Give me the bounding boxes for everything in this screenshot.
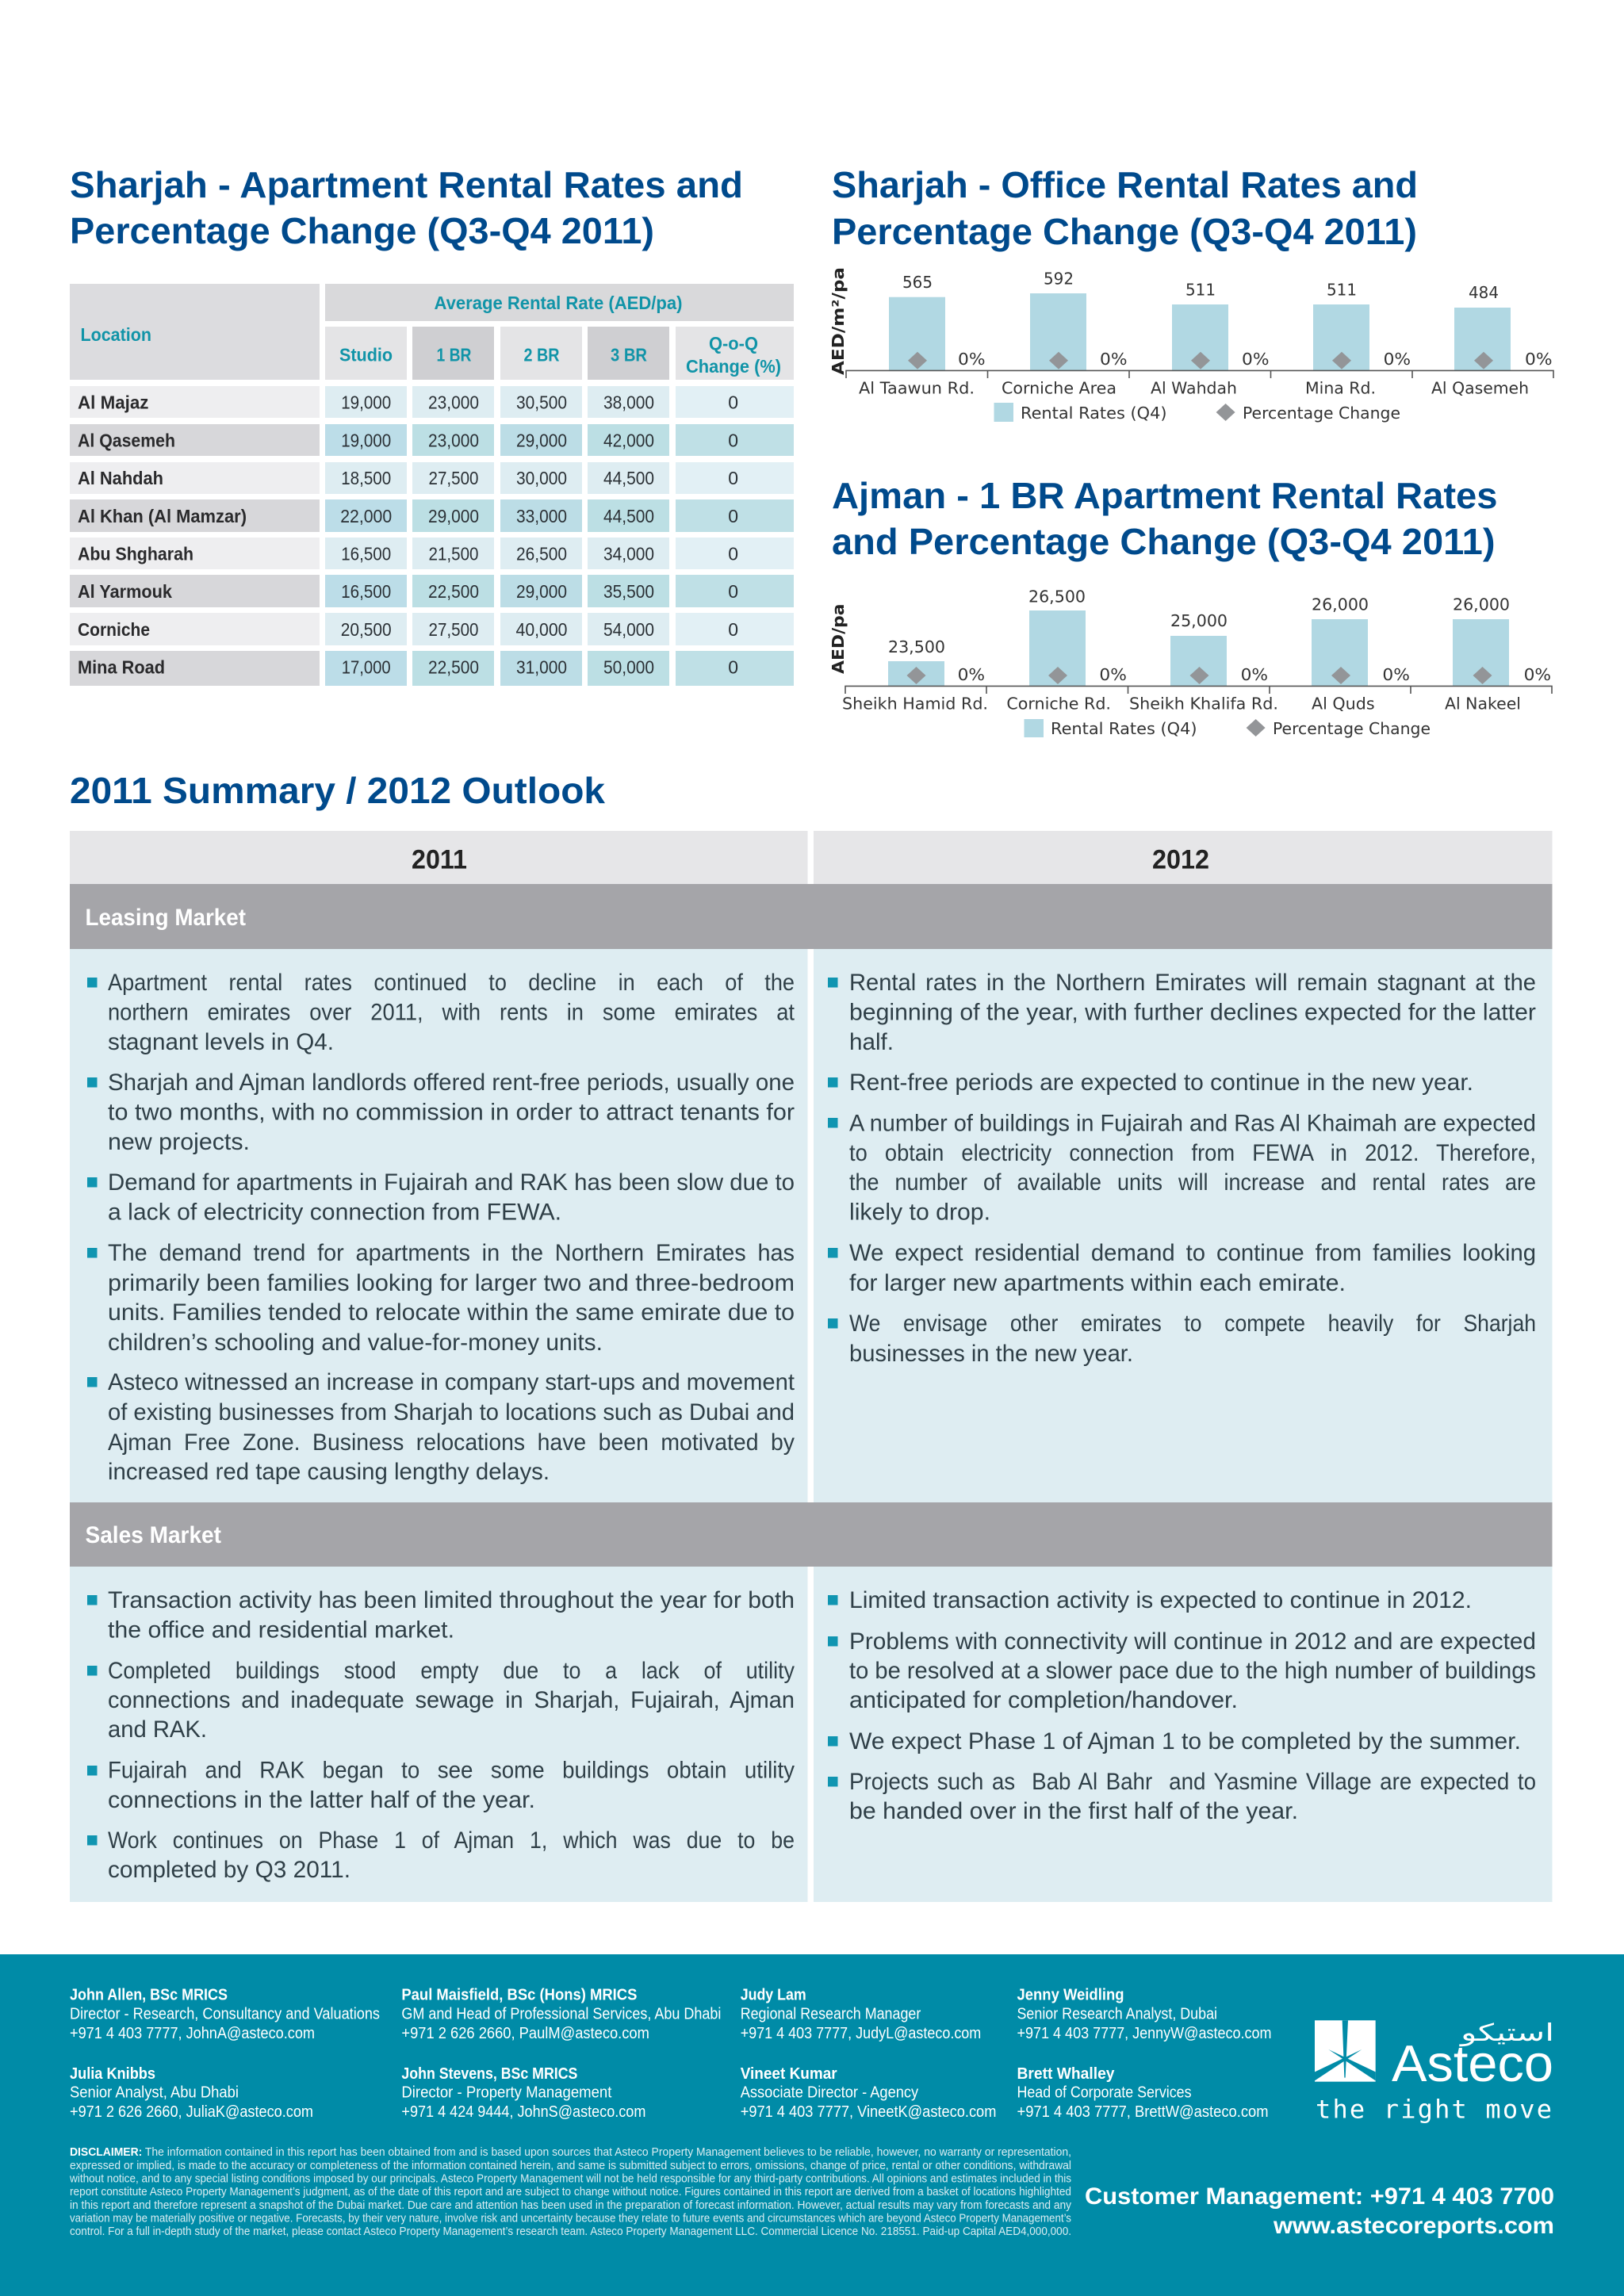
panel: sales market 2011: Completed buildings stood empty due to a lack of utility [108,1658,795,1684]
table row: Al Qasemeh: 0 [728,430,738,450]
table: Sharjah apartment rental rates [70,284,794,686]
table header: Change (%) [686,356,781,377]
panel: sales market 2011: connections and inadequate sewage in Sharjah, Fujairah, Ajman [108,1687,795,1713]
panel: leasing market 2011: children’s schooling and value-for-money units. [108,1330,603,1356]
table row: Mina Road [70,651,794,686]
panel: leasing market 2012: A number of buildings in Fujairah and Ras Al Khaimah are expected [849,1110,1536,1137]
panel: leasing market 2012: We expect residential demand to continue from families looking [849,1240,1536,1266]
axis [845,686,1552,694]
panel: leasing market 2012: likely to drop. [849,1199,990,1226]
table row: Al Yarmouk: 0 [728,581,738,602]
category labels: Al Wahdah [1151,379,1237,398]
panel: leasing market 2012 [814,949,1553,1502]
category labels: Corniche Area [1002,379,1116,398]
panel: leasing market 2011: Sharjah and Ajman landlords offered rent-free periods, usually one [108,1070,795,1096]
table row: Al Khan (Al Mamzar): 22,000 [340,506,392,526]
contact: Paul Maisfield [401,1987,721,2042]
panel: leasing market 2011: northern emirates over 2011, with rents in some emirates at [108,999,795,1026]
panel: sales market 2012: anticipated for completion/handover. [849,1687,1238,1713]
table header: 1 BR [436,344,472,365]
table row: Mina Road: 31,000 [516,656,567,677]
percentage change markers: 0% [1525,350,1553,369]
panel: sales market 2011 [70,1567,807,1902]
table row: Abu Shgharah: 0 [728,544,738,564]
category labels: Al Qasemeh [1431,379,1529,398]
category labels: Al Nakeel [1445,695,1521,714]
table row: Al Majaz: 30,500 [516,392,567,413]
panel: leasing market 2011: to two months, with no commission in order to attract tenants for [108,1099,795,1126]
contact: Jenny Weidling [1017,1987,1272,2042]
footer [0,1954,1624,2296]
bar values: 25,000 [1170,611,1228,630]
contact: Julia Knibbs: +971 2 626 2660, JuliaK@asteco.com [70,2103,313,2121]
contact: Vineet Kumar: Vineet Kumar [741,2065,837,2083]
disclaimer: variation may be materially positive or negative. Forecasts, by their very nature, involve risk and uncertainty because they relate to future events and circumstances which are beyond Asteco Property Management’s [70,2212,1071,2225]
panel: leasing market 2012: beginning of the year, with further declines expected for the latter [849,999,1536,1026]
panel: sales market 2012: Problems with connectivity will continue in 2012 and are expected [849,1628,1536,1655]
contact: Brett Whalley [1017,2065,1269,2121]
category labels: Al Quds [1312,695,1375,714]
contact: John Allen: +971 4 403 7777, JohnA@asteco.com [70,2025,315,2042]
legend [1025,719,1431,738]
disclaimer: without notice, and to any special listing conditions imposed by our principals. Asteco Property Management will not be held responsible for any third-party contributions. All opinions and estimates included in this [69,2172,1071,2185]
table row: Al Nahdah: 18,500 [341,468,391,488]
year header: 2012 [814,831,1553,884]
category labels: Al Taawun Rd. [859,379,975,398]
percentage change markers: 0% [1384,350,1411,369]
disclaimer: report constitute Asteco Property Management’s judgment, as of the date of this report and are subject to change without notice. Figures contained in this report are derived from a basket of locations highlighted [70,2186,1071,2198]
table row: Al Nahdah: 30,000 [516,468,567,488]
legend [994,403,1400,423]
bar values: 565 [902,273,933,292]
category labels [859,379,1529,398]
table row: Al Yarmouk: 22,500 [428,581,479,602]
year header: 2011: 2011 [412,845,467,875]
panel: sales market 2011: connections in the latter half of the year. [108,1787,535,1813]
heading: Sharjah office rental rates: Sharjah - Office Rental Rates and [832,164,1418,205]
contact: John Stevens: Director - Property Management [401,2084,612,2102]
contact: Brett Whalley: +971 4 403 7777, BrettW@asteco.com [1017,2103,1269,2121]
contact: Paul Maisfield: GM and Head of Professional Services, Abu Dhabi [401,2006,721,2023]
section header: Leasing Market: Leasing Market [86,905,246,931]
percentage change markers: 0% [1099,665,1127,684]
panel: leasing market 2011: stagnant levels in Q4. [108,1029,334,1055]
disclaimer: in this report and therefore represent a snapshot of the Dubai market. Due care and attention has been used in the preparation of forecast information. However, actual results may vary from forecasts and any [70,2199,1072,2212]
table row: Al Nahdah: Al Nahdah [78,468,163,488]
percentage change markers: 0% [958,350,985,369]
table row: Al Nahdah: 0 [728,468,738,488]
disclaimer: DISCLAIMER: The information contained in this report has been obtained from and is based upon sources that Asteco Property Management believes to be reliable, however, no warranty or representation, [70,2146,1071,2159]
section header: Sales Market [70,1502,1553,1567]
contact: Julia Knibbs: Julia Knibbs [70,2065,155,2083]
table row: Al Qasemeh: 42,000 [603,430,654,450]
contact: Vineet Kumar: Associate Director - Agency [741,2084,918,2102]
table row: Al Yarmouk: 29,000 [516,581,567,602]
bar values: 26,000 [1453,595,1510,614]
heading: Ajman apartment rental rates [832,475,1497,562]
category labels: Sheikh Hamid Rd. [842,695,988,714]
contact: John Stevens: John Stevens, BSc MRICS [401,2065,577,2083]
contact: Brett Whalley: Head of Corporate Services [1017,2084,1191,2102]
heading: Sharjah apartment rental rates [70,164,743,251]
panel: leasing market 2011: increased red tape causing lengthy delays. [108,1459,550,1485]
bar values: 511 [1327,281,1357,300]
panel: sales market 2012: Projects such as Bab Al Bahr and Yasmine Village are expected to [849,1769,1536,1795]
panel: sales market 2012: Limited transaction activity is expected to continue in 2012. [849,1587,1472,1613]
panel: sales market 2011: Transaction activity has been limited throughout the year for both [108,1587,795,1613]
contact: John Stevens: +971 4 424 9444, JohnS@asteco.com [401,2103,645,2121]
logo: Asteco [1315,2019,1554,2125]
contact: Julia Knibbs: Senior Analyst, Abu Dhabi [70,2084,239,2102]
customer management contact [1085,2183,1554,2239]
disclaimer [69,2146,1072,2238]
contact: Judy Lam: Judy Lam [741,1987,806,2004]
panel: leasing market 2012: to obtain electricity connection from FEWA in 2012. Therefore, [849,1140,1536,1166]
panel: leasing market 2012: the number of available units will increase and rental rates are [849,1169,1536,1196]
table row: Corniche: 20,500 [341,619,392,640]
panel: leasing market 2011: units. Families tended to relocate within the same emirate due to [108,1299,795,1326]
bar values: 26,000 [1312,595,1369,614]
percentage change markers: 0% [1524,665,1551,684]
table row: Al Khan (Al Mamzar): 0 [728,506,738,526]
panel: sales market 2011: the office and residential market. [108,1617,454,1643]
table header: Location [81,324,151,345]
table row: Al Qasemeh: 19,000 [341,430,391,450]
contact: Judy Lam: Regional Research Manager [741,2006,921,2023]
contact: Paul Maisfield: Paul Maisfield, BSc (Hons) MRICS [401,1987,637,2004]
percentage change markers: 0% [1242,350,1269,369]
panel: leasing market 2011: a lack of electricity connection from FEWA. [108,1199,561,1226]
panel: leasing market 2012: We envisage other emirates to compete heavily for Sharjah [849,1311,1536,1337]
table row: Al Majaz [70,386,794,418]
table row: Abu Shgharah: 21,500 [428,544,479,564]
table row: Al Nahdah [70,462,794,494]
contact: Jenny Weidling: +971 4 403 7777, JennyW@asteco.com [1017,2025,1272,2042]
percentage change markers: 0% [1382,665,1410,684]
contact: John Allen: Director - Research, Consultancy and Valuations [70,2006,380,2023]
panel: sales market 2011: and RAK. [108,1716,207,1743]
table row: Al Qasemeh [70,424,794,456]
table row: Al Yarmouk: Al Yarmouk [78,581,172,602]
heading: Ajman apartment rental rates: Ajman - 1 BR Apartment Rental Rates [832,475,1497,516]
table row: Abu Shgharah: 34,000 [603,544,654,564]
table row: Al Majaz: 23,000 [428,392,479,413]
heading: Sharjah apartment rental rates: Percentage Change (Q3-Q4 2011) [70,210,654,251]
table row: Mina Road: 50,000 [603,656,654,677]
bar values: 23,500 [888,637,945,656]
table row: Al Yarmouk [70,575,794,607]
table row: Corniche: 27,500 [428,619,479,640]
contact: Vineet Kumar: +971 4 403 7777, VineetK@asteco.com [741,2103,996,2121]
table row: Al Qasemeh: 29,000 [516,430,567,450]
panel: leasing market 2011: of existing businesses from Sharjah to locations such as Dubai and [108,1399,795,1425]
y axis label: AED/m²/pa [829,267,848,375]
tagline: the right move [1316,2095,1552,2125]
percentage change markers: 0% [958,665,985,684]
panel: leasing market 2011: Asteco witnessed an increase in company start-ups and movement [108,1369,795,1395]
panel: leasing market 2011: Ajman Free Zone. Business relocations have been motivated by [108,1429,795,1456]
heading: Sharjah apartment rental rates: Sharjah - Apartment Rental Rates and [70,164,743,205]
contact: John Allen [70,1987,380,2042]
bar values [902,270,1499,302]
contact: John Stevens [401,2065,645,2121]
percentage change markers: 0% [1100,350,1128,369]
panel: leasing market 2011: new projects. [108,1129,250,1155]
table row: Al Majaz: 19,000 [341,392,391,413]
percentage change markers: 0% [1241,665,1268,684]
panel: leasing market 2011: Apartment rental rates continued to decline in each of the [108,970,795,996]
bar chart: Sharjah office rental rates [829,267,1553,423]
bar values: 592 [1044,270,1074,289]
contact: Julia Knibbs [70,2065,313,2121]
panel: summary and outlook [70,831,1553,1902]
table row: Al Majaz: Al Majaz [78,392,149,413]
table row: Al Khan (Al Mamzar): Al Khan (Al Mamzar) [78,506,247,526]
contact: Judy Lam [741,1987,981,2042]
table row: Abu Shgharah: Abu Shgharah [78,544,193,564]
table row: Al Khan (Al Mamzar): 33,000 [516,506,567,526]
heading: Sharjah office rental rates [832,164,1418,252]
y axis label: AED/pa [829,604,848,674]
contact: Jenny Weidling: Jenny Weidling [1017,1987,1124,2004]
panel: sales market 2011: Fujairah and RAK began to see some buildings obtain utility [108,1758,795,1784]
percentage change markers [907,665,1551,684]
table header: Q-o-Q [709,333,758,354]
contact: John Allen: John Allen, BSc MRICS [70,1987,228,2004]
table row: Al Khan (Al Mamzar): 29,000 [428,506,479,526]
table header: Studio [339,344,393,365]
contact: Paul Maisfield: +971 2 626 2660, PaulM@asteco.com [401,2025,649,2042]
bars [888,610,1509,686]
table row: Mina Road: 17,000 [342,656,391,677]
panel: leasing market 2012: Rent-free periods are expected to continue in the new year. [849,1070,1473,1096]
panel: leasing market 2012: half. [849,1029,894,1055]
table row: Al Yarmouk: 16,500 [341,581,391,602]
panel: leasing market 2011 [70,949,807,1502]
category labels: Mina Rd. [1305,379,1376,398]
bar values: 484 [1469,283,1499,302]
table row: Al Qasemeh: 23,000 [428,430,479,450]
bar values: 511 [1185,281,1216,300]
table row: Mina Road: Mina Road [78,656,165,677]
panel: leasing market 2011: The demand trend for apartments in the Northern Emirates has [108,1240,795,1266]
bars [889,293,1511,370]
table row: Al Khan (Al Mamzar) [70,499,794,532]
panel: sales market 2011: completed by Q3 2011. [108,1857,350,1883]
table row: Al Majaz: 38,000 [603,392,654,413]
table row: Abu Shgharah [70,538,794,569]
disclaimer: expressed or implied, is made to the accuracy or completeness of the information contained herein, and same is submitted subject to errors, omissions, change of price, rental or other conditions, withdrawal [70,2160,1071,2172]
customer management contact: www.astecoreports.com [1273,2213,1554,2239]
arabic wordmark: استيكو [1458,2019,1554,2047]
table row: Abu Shgharah: 16,500 [341,544,391,564]
legend: Rental Rates (Q4) [1021,404,1167,423]
panel: sales market 2012: to be resolved at a slower pace due to the high number of buildings [849,1658,1536,1684]
table row: Al Nahdah: 27,500 [428,468,479,488]
table row: Al Majaz: 0 [728,392,738,413]
table row: Corniche: Corniche [78,619,150,640]
panel: leasing market 2012: for larger new apartments within each emirate. [849,1270,1346,1296]
icon: Asteco mark [1315,2020,1376,2082]
table row: Al Nahdah: 44,500 [603,468,654,488]
year header: 2011 [70,831,807,884]
customer management contact: Customer Management: +971 4 403 7700 [1085,2183,1554,2210]
table row: Corniche [70,613,794,645]
table row: Corniche: 54,000 [603,619,654,640]
table row: Al Qasemeh: Al Qasemeh [78,430,175,450]
heading: Ajman apartment rental rates: and Percentage Change (Q3-Q4 2011) [832,521,1496,562]
panel: leasing market 2011: primarily been families looking for larger two and three-bedroom [108,1270,795,1296]
bar values [888,587,1510,656]
section header: Sales Market: Sales Market [86,1522,221,1548]
bar chart: Ajman 1 BR rental rates [829,587,1552,738]
table row: Al Yarmouk: 35,500 [603,581,654,602]
panel: sales market 2012: We expect Phase 1 of Ajman 1 to be completed by the summer. [849,1728,1521,1755]
panel: leasing market 2012: businesses in the new year. [849,1341,1133,1367]
table row: Corniche: 40,000 [515,619,568,640]
legend: Rental Rates (Q4) [1051,719,1197,738]
table row: Al Khan (Al Mamzar): 44,500 [603,506,654,526]
panel: leasing market 2011: Demand for apartments in Fujairah and RAK has been slow due to [108,1169,795,1196]
axis [846,370,1553,378]
category labels [842,695,1521,714]
table row: Mina Road: 22,500 [428,656,479,677]
panel: sales market 2011: Work continues on Phase 1 of Ajman 1, which was due to be [108,1827,795,1854]
year header: 2012: 2012 [1152,845,1209,875]
contact: Judy Lam: +971 4 403 7777, JudyL@asteco.com [741,2025,981,2042]
percentage change markers [908,350,1553,369]
table row: Abu Shgharah: 26,500 [516,544,567,564]
contact: Jenny Weidling: Senior Research Analyst, Dubai [1017,2006,1217,2023]
category labels: Corniche Rd. [1006,695,1111,714]
legend: Percentage Change [1273,719,1431,738]
table header [70,284,794,380]
panel: sales market 2012 [814,1567,1553,1902]
section header: Leasing Market [70,884,1553,949]
wordmark: Asteco [1392,2034,1553,2092]
legend: Percentage Change [1243,404,1400,423]
table row: Mina Road: 0 [728,656,738,677]
table row: Corniche: 0 [728,619,738,640]
bar values: 26,500 [1028,587,1086,606]
panel: leasing market 2012: Rental rates in the Northern Emirates will remain stagnant at the [849,970,1536,996]
panel: sales market 2012: be handed over in the first half of the year. [849,1798,1298,1824]
table header: 3 BR [611,344,647,365]
disclaimer: control. For a full in-depth study of the market, please contact Asteco Property Management’s research team. Asteco Property Management LLC. Commercial Licence No. 218551. Paid-up Capital AED4,000,000. [70,2225,1071,2238]
heading: Sharjah office rental rates: Percentage Change (Q3-Q4 2011) [832,211,1417,252]
table header: 2 BR [523,344,560,365]
heading: 2011 Summary / 2012 Outlook: 2011 Summary / 2012 Outlook [70,770,605,811]
table header: Average Rental Rate (AED/pa) [435,293,682,313]
contact: Vineet Kumar [741,2065,996,2121]
category labels: Sheikh Khalifa Rd. [1129,695,1278,714]
contact: Brett Whalley: Brett Whalley [1017,2065,1115,2083]
